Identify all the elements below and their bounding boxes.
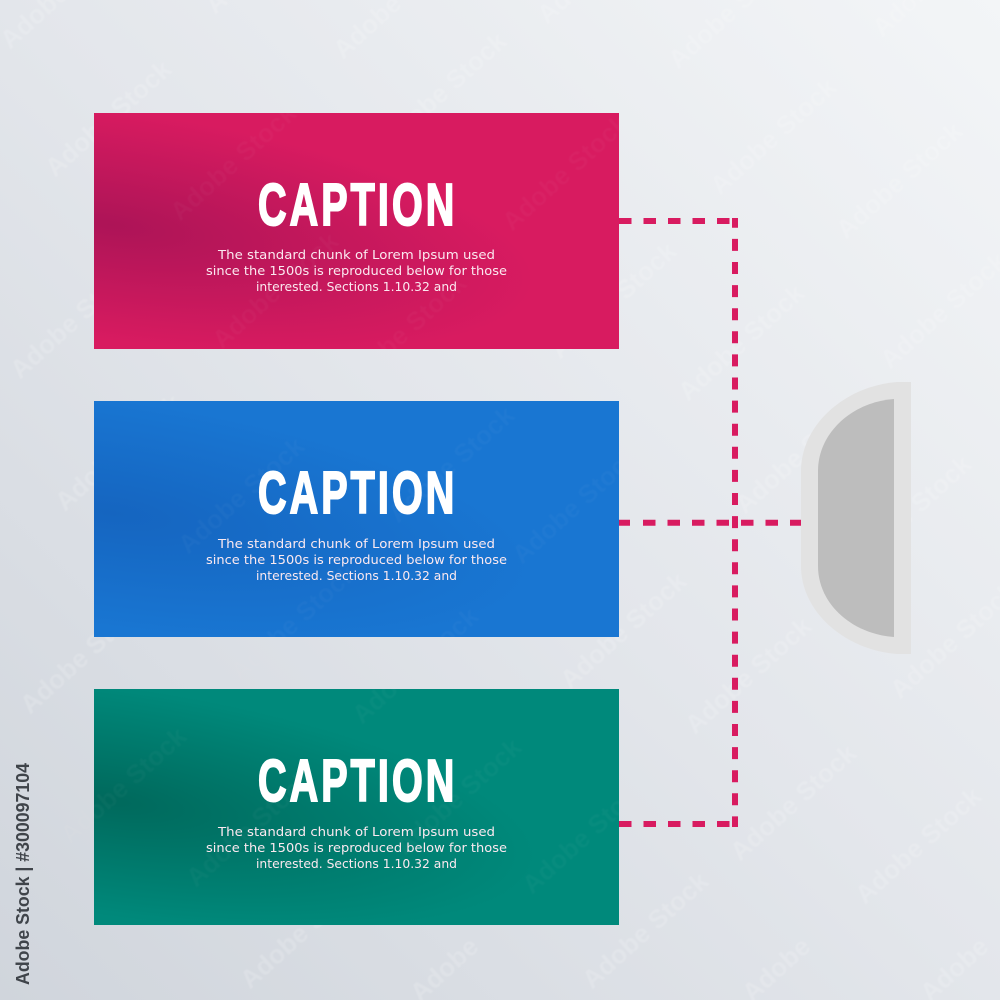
watermarks: Adobe Stock (49, 387, 188, 516)
watermarks: Adobe Stock (830, 115, 969, 244)
watermarks: Adobe Stock (544, 235, 683, 364)
text block: green caption: interested. Sections 1.10.32 and (256, 857, 457, 871)
icon: half capsule (801, 382, 911, 654)
watermarks: Adobe Stock (672, 277, 811, 406)
watermarks over panels: Adobe Stock (382, 399, 521, 528)
text block: blue caption (206, 537, 507, 583)
watermarks over panels: Adobe Stock (206, 225, 345, 354)
text block: blue caption: The standard chunk of Lorem Ipsum used (217, 537, 495, 551)
watermarks over panels: Adobe Stock (516, 770, 655, 899)
watermarks over panels: Adobe Stock (346, 600, 485, 729)
watermarks: Adobe Stock (849, 780, 988, 909)
watermarks: Adobe Stock (576, 865, 715, 994)
text block: pink caption: interested. Sections 1.10.32 and (256, 280, 457, 294)
watermarks: Adobe Stock (554, 565, 693, 694)
heading: blue caption: CAPTION (258, 460, 457, 526)
watermarks: Adobe Stock (704, 71, 843, 200)
dashed connector lines (619, 218, 801, 827)
watermarks over panels: Adobe Stock (180, 763, 319, 892)
watermarks: Adobe Stock (839, 448, 978, 577)
watermarks over panels: Adobe Stock (506, 440, 645, 569)
text block: pink caption: The standard chunk of Lorem Ipsum used (217, 248, 495, 262)
watermarks over panels: Adobe Stock (172, 430, 311, 559)
heading: pink caption: CAPTION (258, 172, 457, 238)
watermarks over panels: Adobe Stock (164, 97, 303, 226)
watermarks: Adobe Stock (374, 25, 513, 154)
text block: pink caption: since the 1500s is reproduced below for those (206, 264, 507, 278)
text block: blue caption: interested. Sections 1.10.32 and (256, 569, 457, 583)
watermarks: Adobe Stock (14, 590, 153, 719)
watermarks over panels: Adobe Stock (334, 267, 473, 396)
watermarks over panels: Adobe Stock (224, 557, 363, 686)
watermarks over panels (54, 97, 655, 899)
watermarks: Adobe Stock (679, 610, 818, 739)
text block: pink caption (206, 248, 507, 294)
stock id label: Adobe Stock | #300097104 (13, 763, 33, 985)
watermarks over panels: Adobe Stock (496, 107, 635, 236)
text block: green caption (206, 825, 507, 871)
watermarks over panels: Adobe Stock (54, 720, 193, 849)
panel: blue caption (94, 401, 619, 637)
text block: green caption: since the 1500s is reproduced below for those (206, 841, 507, 855)
watermarks: Adobe Stock (724, 737, 863, 866)
watermarks: Adobe Stock (234, 865, 373, 994)
text block: blue caption: since the 1500s is reproduced below for those (206, 553, 507, 567)
panel: pink caption (94, 113, 619, 349)
watermarks: Adobe Stock (39, 53, 178, 182)
panel: green caption (94, 689, 619, 925)
heading: green caption: CAPTION (258, 748, 457, 814)
watermarks over panels: Adobe Stock (389, 731, 528, 860)
text block: green caption: The standard chunk of Lorem Ipsum used (217, 825, 495, 839)
watermarks: Adobe Stock (729, 390, 868, 519)
watermarks: Adobe Stock (4, 255, 143, 384)
